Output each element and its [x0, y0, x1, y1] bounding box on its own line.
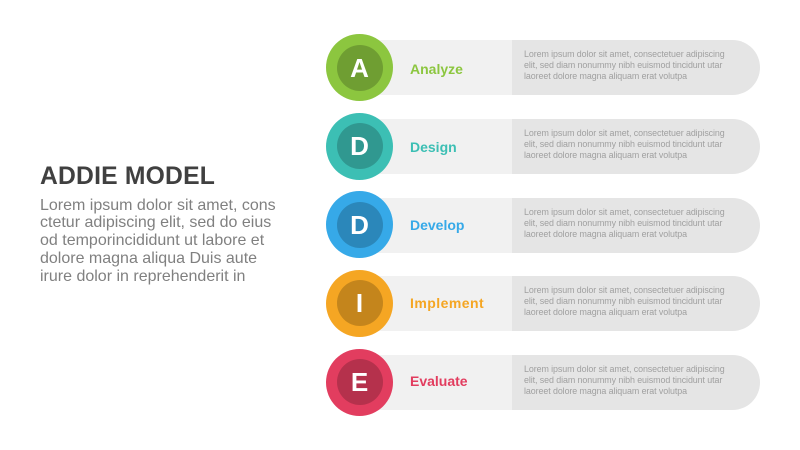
label: Develop: Develop — [410, 217, 464, 233]
intro text block: irure dolor in reprehenderit in — [40, 268, 245, 285]
title: ADDIE MODEL — [40, 163, 215, 190]
icon: letter A circle: A — [350, 52, 369, 82]
icon: letter E circle: E — [351, 367, 368, 397]
label bar: Implement — [356, 276, 512, 331]
row: Evaluate — [326, 349, 760, 416]
description panel: Implement: laoreet dolore magna aliquam erat volutpa — [524, 307, 687, 317]
icon: letter A circle — [326, 34, 393, 101]
intro text block: ctetur adipiscing elit, sed do eius — [40, 214, 271, 231]
description panel: Analyze: Lorem ipsum dolor sit amet, consectetuer adipiscing — [524, 49, 725, 59]
intro text block: dolore magna aliqua Duis aute — [40, 250, 257, 267]
icon: letter D circle: D — [350, 210, 369, 240]
intro text block — [40, 196, 276, 285]
description panel: Implement: Lorem ipsum dolor sit amet, consectetuer adipiscing — [524, 285, 725, 295]
description panel: Design: laoreet dolore magna aliquam erat volutpa — [524, 150, 687, 160]
description panel: Evaluate: laoreet dolore magna aliquam erat volutpa — [524, 386, 687, 396]
icon: letter I circle: I — [356, 288, 363, 318]
label bar: Design — [356, 119, 512, 174]
description panel: Develop: laoreet dolore magna aliquam erat volutpa — [524, 228, 687, 238]
description panel: Design: elit, sed diam nonummy nibh euismod tincidunt utar — [524, 139, 722, 149]
description panel: Develop: Lorem ipsum dolor sit amet, consectetuer adipiscing — [524, 206, 725, 216]
label: Implement: Implement — [410, 295, 484, 311]
icon: letter I circle — [326, 270, 393, 336]
label: Design: Design — [410, 139, 457, 155]
description panel: Design: Lorem ipsum dolor sit amet, consectetuer adipiscing — [524, 128, 725, 138]
description panel: Evaluate: elit, sed diam nonummy nibh euismod tincidunt utar — [524, 375, 722, 385]
row: Design — [326, 113, 760, 180]
row: Implement — [326, 270, 760, 337]
icon: letter E circle — [326, 348, 393, 416]
intro text block: od temporincididunt ut labore et — [40, 232, 264, 249]
icon: letter D circle — [326, 191, 393, 258]
description panel: Analyze: laoreet dolore magna aliquam erat volutpa — [524, 71, 687, 81]
label: Evaluate: Evaluate — [410, 373, 468, 389]
label: Analyze: Analyze — [410, 61, 463, 77]
intro text block: Lorem ipsum dolor sit amet, cons — [40, 196, 276, 214]
label bar: Analyze — [356, 40, 512, 95]
icon: letter D circle — [326, 112, 393, 180]
description panel: Develop — [512, 198, 760, 252]
icon: letter D circle: D — [350, 131, 369, 161]
description panel: Implement — [512, 276, 760, 331]
description panel: Evaluate: Lorem ipsum dolor sit amet, consectetuer adipiscing — [524, 364, 725, 374]
description panel: Analyze: elit, sed diam nonummy nibh euismod tincidunt utar — [524, 60, 722, 70]
description panel: Develop: elit, sed diam nonummy nibh euismod tincidunt utar — [524, 218, 722, 228]
row: Analyze — [326, 34, 760, 101]
label bar: Evaluate — [356, 355, 512, 410]
description panel: Implement: elit, sed diam nonummy nibh euismod tincidunt utar — [524, 296, 722, 306]
description panel: Evaluate — [512, 355, 760, 410]
label bar: Develop — [356, 198, 512, 252]
description panel: Design — [512, 119, 760, 174]
row: Develop — [326, 191, 760, 258]
description panel: Analyze — [512, 40, 760, 95]
